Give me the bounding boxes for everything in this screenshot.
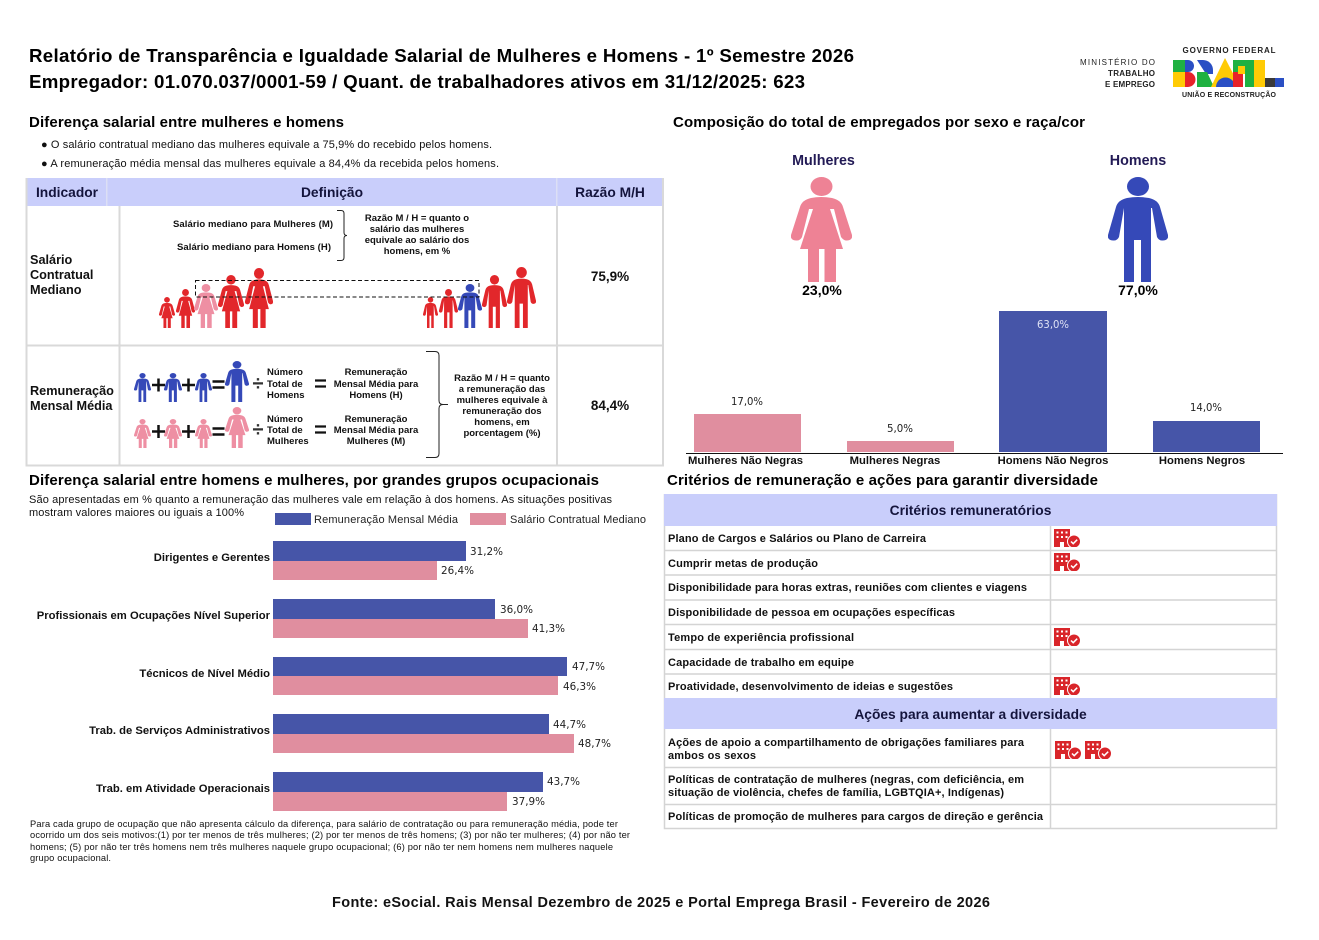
formula: men: ÷ xyxy=(253,373,264,395)
criteria rows xyxy=(668,533,1027,693)
definition: razão remuneração text xyxy=(454,373,550,439)
intro text: São apresentadas em % quanto a remuneração das mulheres vale em relação à dos homens. As situações positivas xyxy=(29,494,612,506)
icon group: women by salary xyxy=(159,268,273,328)
logo: ministério do trabalho e emprego: MINISTÉRIO DO xyxy=(1080,58,1155,67)
bar chart: composition by race: 63,0% xyxy=(1037,318,1069,331)
definition: razão remuneração text: remuneração dos xyxy=(462,406,542,417)
formula: men xyxy=(134,361,419,402)
dashed comparison box xyxy=(196,280,479,297)
logo: governo federal brasil: UNIÃO E RECONSTRUÇÃO xyxy=(1182,90,1277,99)
formula: women: Mensal Média para xyxy=(334,425,419,436)
title xyxy=(29,45,854,92)
row label: remuneração mensal média: Remuneração xyxy=(30,384,114,398)
formula: women: Remuneração xyxy=(345,414,408,425)
legend xyxy=(275,513,646,526)
formula: women xyxy=(134,407,419,448)
criteria rows: Plano de Cargos e Salários ou Plano de Carreira xyxy=(668,533,927,545)
formula: men: Total de xyxy=(267,379,303,390)
table header: Razão M/H xyxy=(575,185,645,200)
formula: women: Número xyxy=(267,414,303,425)
bullet text: ● A remuneração média mensal das mulheres equivale a 84,4% da recebida pelos homens. xyxy=(41,158,499,170)
panel: indicator table xyxy=(26,178,664,466)
bar chart: composition by race: Homens Não Negros xyxy=(998,455,1108,467)
footnote: Para cada grupo de ocupação que não apresenta cálculo da diferença, para salário de contratação ou para remuneração média, pode ter xyxy=(30,819,618,829)
logo: ministério do trabalho e emprego: E EMPREGO xyxy=(1105,80,1155,89)
action rows: Ações de apoio a compartilhamento de obrigações familiares para xyxy=(668,737,1025,749)
icon group: men by salary xyxy=(423,267,536,328)
bar chart: occupational groups xyxy=(37,541,611,811)
brace: median xyxy=(337,210,347,260)
bullet text: ● O salário contratual mediano das mulheres equivale a 75,9% do recebido pelos homens. xyxy=(41,139,492,151)
header: ações: Ações para aumentar a diversidade xyxy=(854,707,1087,722)
formula: men: Remuneração xyxy=(345,367,408,378)
row label: salário contratual mediano: Contratual xyxy=(30,268,93,282)
logo: ministério do trabalho e emprego xyxy=(1080,58,1155,89)
definition: razão text: salário das mulheres xyxy=(370,224,464,235)
formula: men: Mensal Média para xyxy=(334,379,419,390)
action rows: Políticas de contratação de mulheres (negras, com deficiência, em xyxy=(668,774,1024,786)
definition: razão text xyxy=(365,213,469,257)
panel: women total: 23,0% xyxy=(802,282,842,298)
header: ações xyxy=(664,698,1277,729)
header: critérios remuneratórios xyxy=(664,494,1277,526)
formula: men: Número xyxy=(267,367,303,378)
bar chart: composition by race: Mulheres Não Negras xyxy=(688,455,803,467)
formula: men: Homens xyxy=(267,390,304,401)
group: serviços administrativos: 48,7% xyxy=(578,737,611,750)
group: profissionais xyxy=(37,599,565,638)
group: atividade operacional: Trab. em Atividade Operacionais xyxy=(96,783,270,795)
criteria rows: Capacidade de trabalho em equipe xyxy=(668,657,854,669)
definition: median labels: Salário mediano para Homens (H) xyxy=(177,242,331,253)
brace: average xyxy=(426,352,448,458)
row label: salário contratual mediano xyxy=(30,253,93,297)
definition: median labels: Salário mediano para Mulheres (M) xyxy=(173,219,333,230)
heading: critérios: Critérios de remuneração e ações para garantir diversidade xyxy=(667,472,1098,489)
title: Relatório de Transparência e Igualdade Salarial de Mulheres e Homens - 1º Semestre 2026 xyxy=(29,45,854,66)
bar chart: composition by race: 17,0% xyxy=(731,395,763,408)
group: técnicos xyxy=(139,657,605,695)
row label: remuneração mensal média xyxy=(30,384,114,413)
panel: women total xyxy=(791,153,855,298)
intro text xyxy=(29,494,612,519)
bar chart: composition by race xyxy=(686,311,1283,467)
logo: governo federal brasil: GOVERNO FEDERAL xyxy=(1182,46,1276,55)
group: técnicos: Técnicos de Nível Médio xyxy=(139,668,270,680)
definition: razão remuneração text: Razão M / H = quanto xyxy=(454,373,550,384)
intro text: mostram valores maiores ou iguais a 100% xyxy=(29,507,244,519)
definition: median labels xyxy=(173,219,333,253)
action rows xyxy=(668,737,1044,823)
panel: women total: Mulheres xyxy=(792,153,855,169)
panel: men total: Homens xyxy=(1110,153,1166,169)
criteria rows: Disponibilidade para horas extras, reuniões com clientes e viagens xyxy=(668,582,1027,594)
criteria rows: Tempo de experiência profissional xyxy=(668,632,854,644)
panel: men total: 77,0% xyxy=(1118,282,1158,298)
group: profissionais: Profissionais em Ocupações Nível Superior xyxy=(37,610,271,622)
icons: company actions xyxy=(1055,741,1112,760)
heading: diferença salarial: Diferença salarial entre mulheres e homens xyxy=(29,114,344,131)
group: técnicos: 46,3% xyxy=(563,680,596,693)
action rows: situação de violência, chefes de família, LGBTQIA+, Indígenas) xyxy=(668,787,1004,799)
group: técnicos: 47,7% xyxy=(572,660,605,673)
bar chart: composition by race: 5,0% xyxy=(887,422,913,435)
value: 75,9%: 75,9% xyxy=(591,269,629,284)
criteria rows: Disponibilidade de pessoa em ocupações específicas xyxy=(668,607,955,619)
criteria rows: Proatividade, desenvolvimento de ideias e sugestões xyxy=(668,681,953,693)
table header: Indicador xyxy=(36,185,99,200)
heading: grupos ocupacionais: Diferença salarial entre homens e mulheres, por grandes grupos ocupacionais xyxy=(29,472,599,489)
definition: razão remuneração text: porcentagem (%) xyxy=(463,428,541,439)
table header: Definição xyxy=(301,185,363,200)
logo: ministério do trabalho e emprego: TRABALHO xyxy=(1108,69,1155,78)
action rows: Políticas de promoção de mulheres para cargos de direção e gerência xyxy=(668,811,1044,823)
bar chart: composition by race: Mulheres Negras xyxy=(850,455,940,467)
row label: salário contratual mediano: Salário xyxy=(30,253,73,267)
group: atividade operacional: 43,7% xyxy=(547,775,580,788)
group: dirigentes: 26,4% xyxy=(441,564,474,577)
panel: criteria table xyxy=(664,494,1277,828)
row label: salário contratual mediano: Mediano xyxy=(30,283,82,297)
definition: razão text: homens, em % xyxy=(384,246,451,257)
bullet text xyxy=(41,139,499,170)
group: serviços administrativos: 44,7% xyxy=(553,718,586,731)
formula: men: Homens (H) xyxy=(349,390,403,401)
definition: razão remuneração text: mulheres equivale à xyxy=(457,395,548,406)
formula: women: ÷ xyxy=(253,419,264,441)
group: profissionais: 41,3% xyxy=(532,622,565,635)
definition: razão text: Razão M / H = quanto o xyxy=(365,213,469,224)
definition: razão text: equivale ao salário dos xyxy=(365,235,469,246)
legend: Remuneração Mensal Média xyxy=(314,514,459,526)
footnote xyxy=(30,819,630,863)
footnote: ocorrido um dos seis motivos:(1) por ter menos de três mulheres; (2) por ter menos de três homens; (3) por não ter mulheres; (4) por não ter xyxy=(30,830,630,840)
row label: remuneração mensal média: Mensal Média xyxy=(30,399,113,413)
table header xyxy=(26,178,664,206)
action rows: ambos os sexos xyxy=(668,750,756,762)
value: 84,4%: 84,4% xyxy=(591,398,629,413)
criteria rows: Cumprir metas de produção xyxy=(668,558,818,570)
logo: governo federal brasil xyxy=(1173,46,1284,99)
panel: men total xyxy=(1108,153,1168,298)
formula: women: Total de xyxy=(267,425,303,436)
group: dirigentes: 31,2% xyxy=(470,545,503,558)
formula: women: Mulheres xyxy=(267,436,309,447)
group: serviços administrativos xyxy=(89,714,611,753)
header: critérios remuneratórios: Critérios remuneratórios xyxy=(890,503,1052,518)
footnote: homens; (5) por não ter três homens nem três mulheres naquele grupo ocupacional; (6) por não ter nem homens nem mulheres naquele xyxy=(30,842,613,852)
bar chart: composition by race: Homens Negros xyxy=(1159,455,1245,467)
group: serviços administrativos: Trab. de Serviços Administrativos xyxy=(89,725,270,737)
footnote: grupo ocupacional. xyxy=(30,853,111,863)
group: atividade operacional xyxy=(96,772,580,811)
definition: razão remuneração text: homens, em xyxy=(474,417,530,428)
icons: company criteria xyxy=(1054,529,1080,696)
formula: women: Mulheres (M) xyxy=(347,436,405,447)
title: Empregador: 01.070.037/0001-59 / Quant. de trabalhadores ativos em 31/12/2025: 623 xyxy=(29,71,805,92)
legend: Salário Contratual Mediano xyxy=(510,514,646,526)
group: atividade operacional: 37,9% xyxy=(512,795,545,808)
definition: razão remuneração text: a remuneração das xyxy=(459,384,545,395)
group: dirigentes: Dirigentes e Gerentes xyxy=(154,552,270,564)
group: dirigentes xyxy=(154,541,503,580)
heading: composição: Composição do total de empregados por sexo e raça/cor xyxy=(673,114,1085,131)
group: profissionais: 36,0% xyxy=(500,603,533,616)
source: Fonte: eSocial. Rais Mensal Dezembro de 2025 e Portal Emprega Brasil - Fevereiro de 2026 xyxy=(332,895,990,911)
bar chart: composition by race: 14,0% xyxy=(1190,401,1222,414)
